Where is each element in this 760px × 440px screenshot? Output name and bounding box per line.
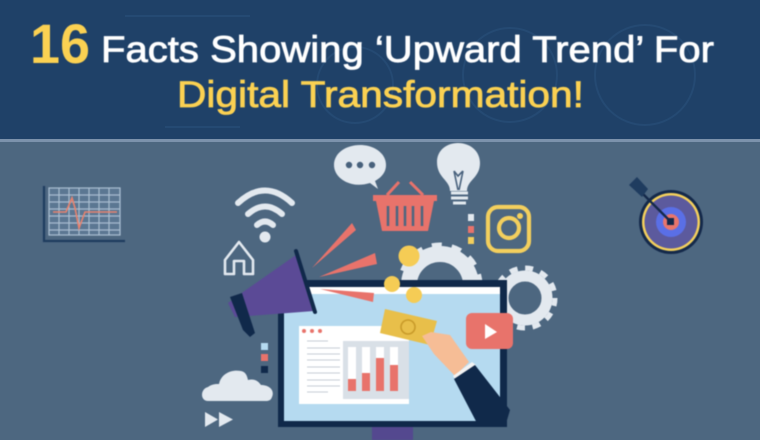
illustration xyxy=(44,143,703,440)
icon: line chart xyxy=(44,186,125,241)
small squares upper xyxy=(468,214,474,244)
icon: shopping basket xyxy=(373,182,437,231)
icon: wifi xyxy=(238,190,292,242)
rays xyxy=(312,223,377,302)
title number 16: 16 xyxy=(30,12,90,75)
icon: light bulb xyxy=(437,143,480,203)
icon: speech bubble xyxy=(334,145,386,189)
icon: small gear xyxy=(495,268,555,328)
icon: instagram xyxy=(488,207,529,251)
small squares lower xyxy=(261,343,268,373)
icon: house xyxy=(225,242,253,274)
title line 2: Digital Transformation! xyxy=(177,74,584,115)
title xyxy=(30,12,714,115)
monitor stand xyxy=(372,426,413,440)
monitor xyxy=(278,280,510,427)
screen window with bar chart xyxy=(299,326,409,404)
title line 1: Facts Showing ‘Upward Trend’ For xyxy=(101,29,714,70)
icon: video play button xyxy=(466,313,513,349)
icon: sleeve and hand xyxy=(422,332,510,427)
icon: cloud xyxy=(202,371,273,401)
coins xyxy=(384,246,422,303)
icon: megaphone xyxy=(228,251,315,337)
header band xyxy=(0,0,760,142)
icon: target with arrow xyxy=(629,177,703,254)
icon: banknote xyxy=(380,309,437,345)
icon: large gear xyxy=(400,245,480,325)
icon: fast forward xyxy=(205,412,233,427)
